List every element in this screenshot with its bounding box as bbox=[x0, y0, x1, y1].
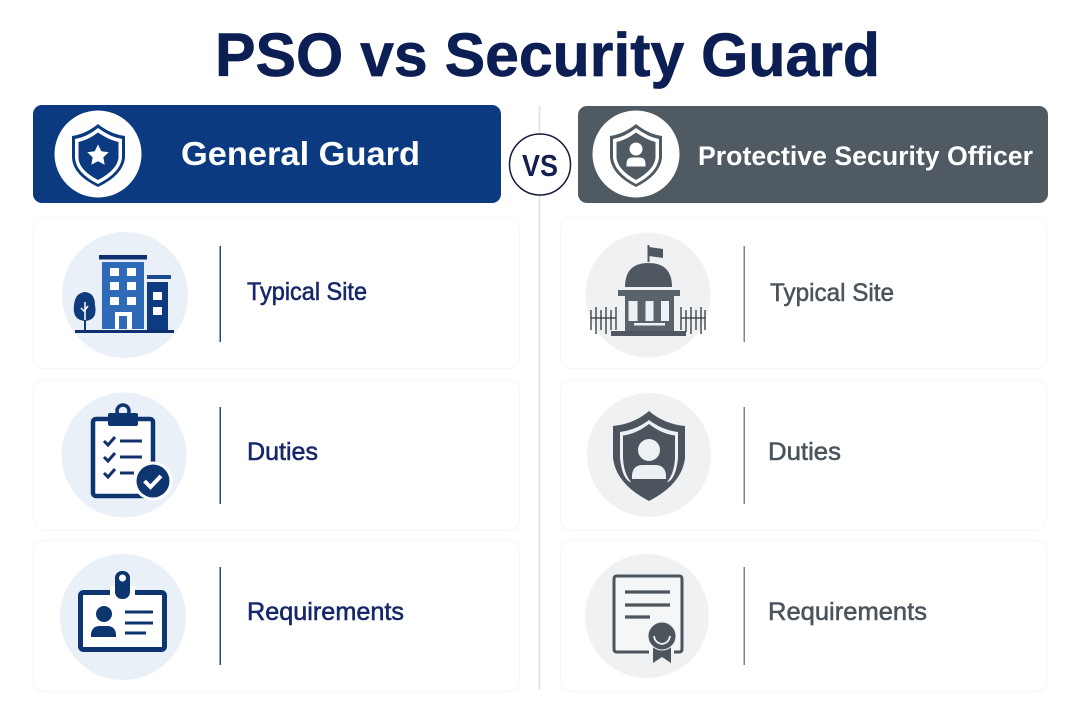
header text: Protective Security Officer: Protective Security Officer bbox=[698, 141, 1033, 171]
icon: certificate with seal bbox=[614, 576, 682, 663]
panel: General Guard requirements bbox=[34, 540, 520, 692]
label: duties: Duties bbox=[768, 438, 841, 466]
panel: PSO requirements bbox=[560, 540, 1046, 692]
icon: government building with fence bbox=[591, 245, 705, 336]
panel: General Guard duties bbox=[34, 380, 520, 530]
label: requirements: Requirements bbox=[768, 598, 927, 626]
icon: office building bbox=[74, 255, 174, 333]
label: requirements: Requirements bbox=[247, 598, 404, 626]
vs badge: VS bbox=[522, 148, 558, 183]
icon: shield with person bbox=[610, 124, 662, 187]
label: typical site: Typical Site bbox=[247, 278, 367, 306]
panel: General Guard header bbox=[33, 105, 501, 203]
header text: General Guard: General Guard bbox=[181, 135, 420, 172]
icon: shield with person bbox=[613, 411, 685, 501]
panel: PSO typical site bbox=[560, 218, 1046, 368]
panel: Protective Security Officer header bbox=[578, 106, 1048, 203]
label: duties: Duties bbox=[247, 438, 318, 466]
icon: shield with star bbox=[72, 124, 125, 187]
vs badge bbox=[510, 134, 570, 195]
panel: PSO duties bbox=[560, 380, 1046, 530]
label: typical site: Typical Site bbox=[770, 279, 894, 307]
icon: clipboard with check bbox=[93, 405, 172, 500]
icon: ID badge bbox=[80, 571, 164, 650]
title: PSO vs Security Guard bbox=[215, 21, 880, 89]
panel: General Guard typical site bbox=[34, 218, 520, 368]
